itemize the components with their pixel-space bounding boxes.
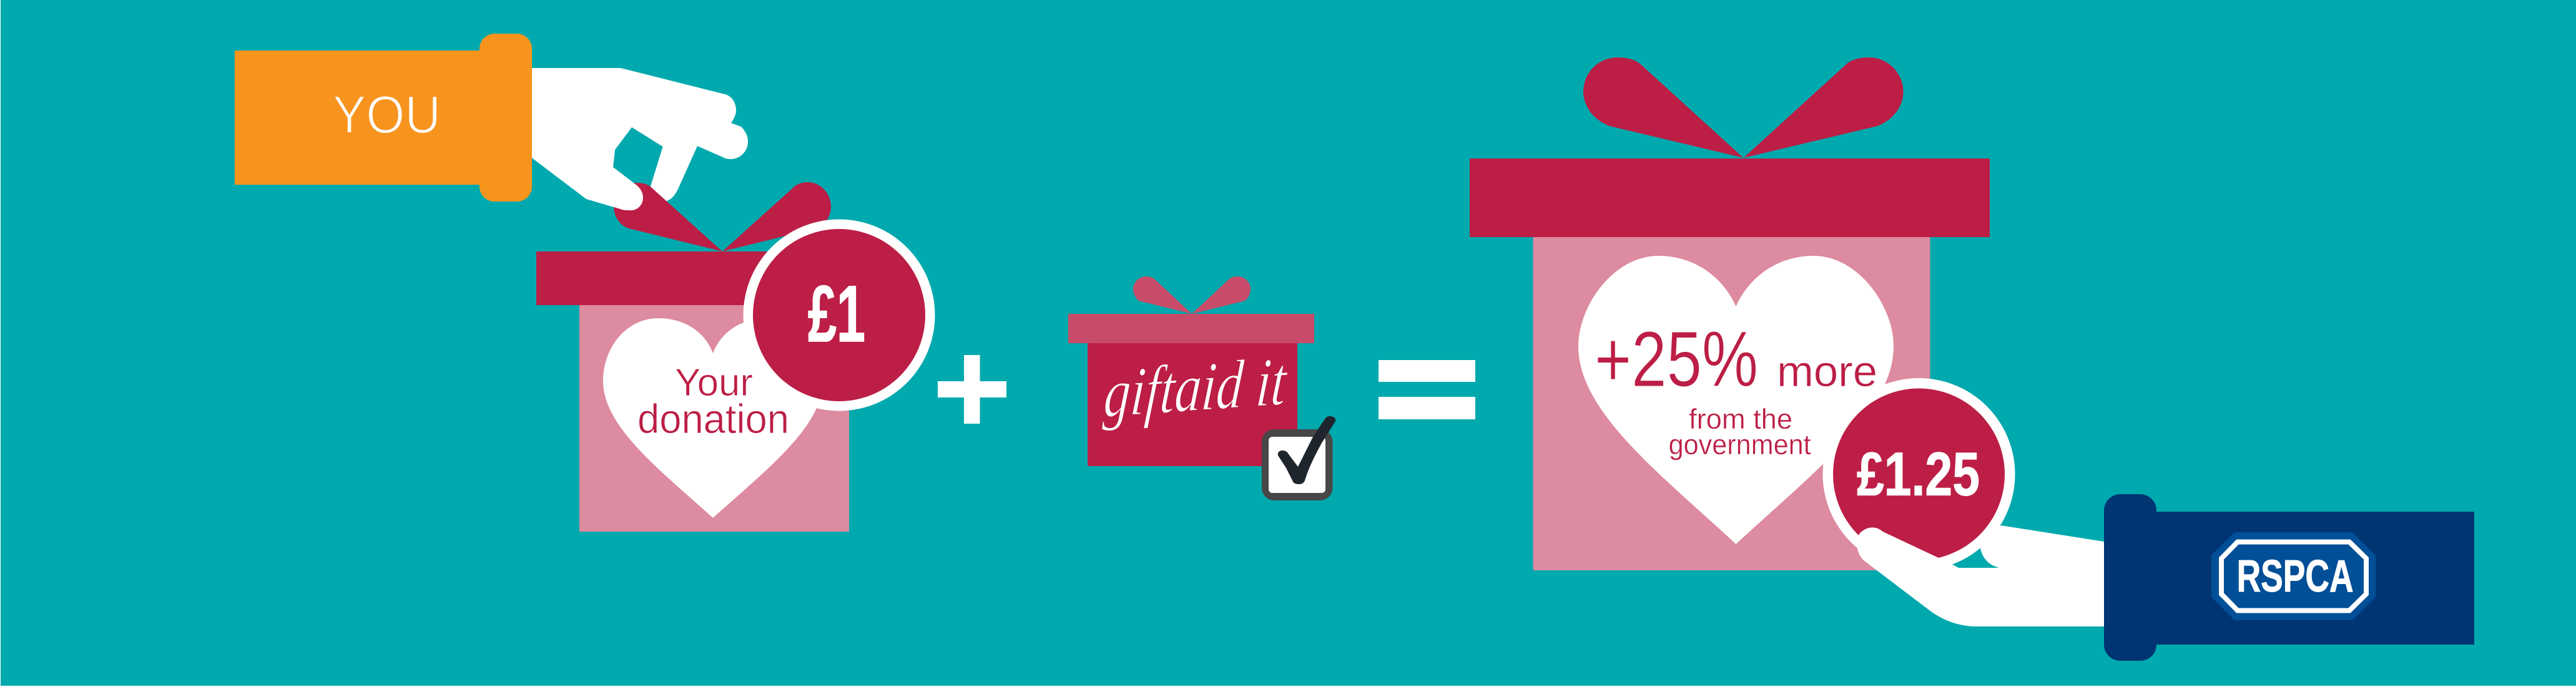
small gift left ribbon loop xyxy=(614,183,722,251)
your hand xyxy=(532,68,748,212)
small gift box: your donation xyxy=(536,182,892,532)
large heart xyxy=(1578,256,1894,544)
large gift ribbon xyxy=(1583,57,1903,158)
equals sign xyxy=(1379,360,1475,419)
donation label: donation xyxy=(637,396,789,442)
orange sleeve xyxy=(235,34,532,202)
small heart xyxy=(603,318,823,518)
RSPCA hand base xyxy=(1959,525,2104,571)
coin: £1: £1 xyxy=(808,270,865,359)
large gift base xyxy=(1533,237,1930,570)
plus 25 percent more label: government xyxy=(1669,429,1811,460)
coin: £1.25 xyxy=(1823,378,2015,570)
small gift base xyxy=(579,305,849,532)
large gift lid xyxy=(1470,158,1990,237)
gift aid it script: giftaid it xyxy=(1101,343,1290,432)
plus 25 percent more label: +25% xyxy=(1595,315,1758,403)
gift aid base xyxy=(1088,343,1297,466)
large gift box xyxy=(1470,57,1990,570)
gift aid box xyxy=(1068,276,1314,466)
donation label: Your xyxy=(675,361,753,404)
tick box xyxy=(1262,416,1335,500)
RSPCA palm and thumb xyxy=(1857,527,2104,626)
plus 25 percent more label xyxy=(1595,315,1877,460)
plus 25 percent more label: from the xyxy=(1689,403,1792,435)
coin: £1.25: £1.25 xyxy=(1857,439,1980,508)
RSPCA logo: RSPCA xyxy=(2237,552,2354,602)
plus sign xyxy=(938,355,1006,424)
coin: £1 xyxy=(743,220,935,411)
sleeve cuff xyxy=(479,34,532,202)
gift aid lid xyxy=(1068,314,1314,343)
small gift lid xyxy=(536,251,892,305)
plus 25 percent more label: more xyxy=(1777,347,1877,396)
hand gap xyxy=(1953,548,1999,568)
RSPCA logo xyxy=(2211,532,2376,620)
donation label xyxy=(637,361,789,442)
you label: YOU xyxy=(333,85,441,145)
gift aid ribbon xyxy=(1133,276,1251,314)
thumb xyxy=(599,167,643,210)
navy sleeve xyxy=(2104,494,2474,661)
tick mark xyxy=(1278,416,1335,484)
small gift right ribbon loop xyxy=(722,182,831,251)
navy cuff xyxy=(2104,494,2156,661)
